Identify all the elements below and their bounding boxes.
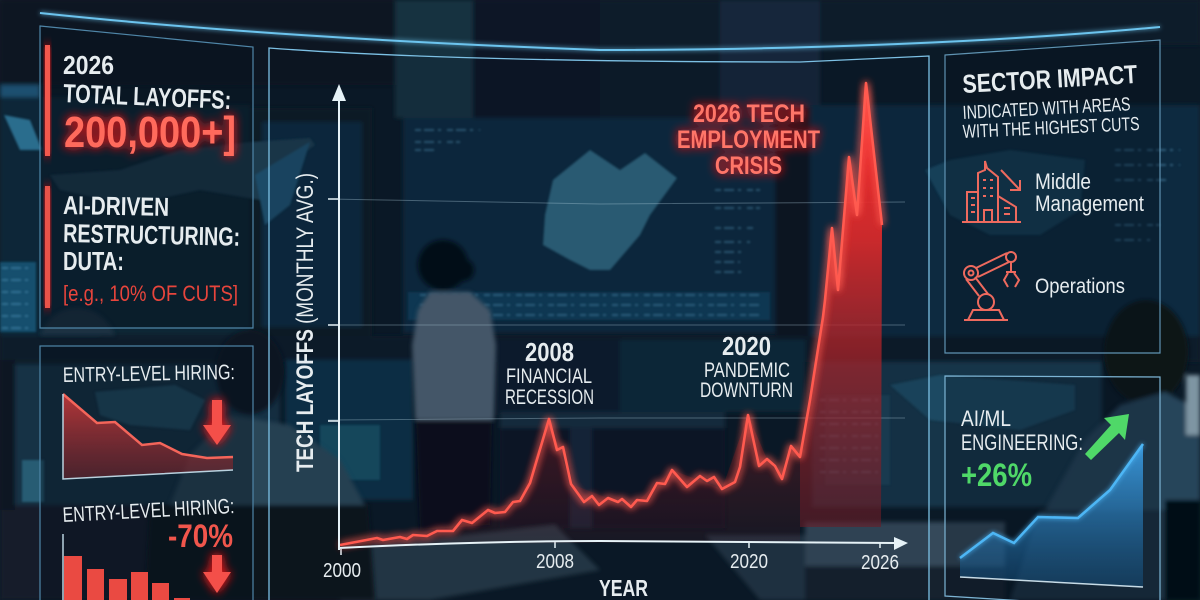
title: 2026 tech employment crisis: EMPLOYMENT	[677, 126, 820, 154]
label: entry-level hiring bars: ENTRY-LEVEL HIRING:	[62, 495, 235, 527]
tick labels: 2026	[861, 552, 899, 574]
title: 2026 tech employment crisis: CRISIS	[715, 152, 782, 180]
area: red fill under curve	[340, 83, 882, 545]
callout: 2020 pandemic downturn	[700, 331, 793, 402]
stat: minus 70 percent: -70%	[168, 518, 233, 554]
tick labels: 2020	[730, 551, 768, 573]
lower band	[0, 336, 1200, 362]
area chart: AI growth	[960, 444, 1143, 587]
icon: down arrow small	[203, 555, 231, 593]
callout: 2008 financial recession: FINANCIAL	[506, 365, 592, 388]
panel: entry-level hiring	[40, 346, 253, 600]
people	[40, 240, 1200, 600]
tick labels: 2008	[536, 551, 574, 573]
callout: 2020 pandemic downturn: PANDEMIC	[704, 359, 790, 382]
stat: 2026 total layoffs: 2026	[63, 50, 114, 80]
callout: 2020 pandemic downturn: 2020	[722, 331, 771, 361]
icon: building with down arrow	[962, 161, 1021, 222]
panel: headline stats	[40, 26, 253, 328]
axis title: y: TECH LAYOFFS (MONTHLY AVG.)	[292, 173, 319, 472]
right monitors	[810, 105, 1200, 340]
stat: 2026 total layoffs	[63, 50, 236, 157]
subheading	[962, 94, 1140, 143]
stat: AI-driven restructuring: AI-DRIVEN	[63, 190, 169, 222]
panel: sector impact	[945, 40, 1160, 353]
stat: AI-driven restructuring: [e.g., 10% OF CUTS]	[63, 281, 238, 306]
stat: AI-driven restructuring	[63, 190, 240, 306]
label: ENGINEERING:	[961, 430, 1083, 455]
label: middle management	[1035, 169, 1144, 216]
icon: down arrow	[203, 400, 231, 445]
subheading: WITH THE HIGHEST CUTS	[962, 114, 1140, 143]
panel: main chart	[269, 48, 929, 600]
title: 2026 tech employment crisis	[677, 100, 820, 180]
label: operations: Operations	[1035, 275, 1125, 298]
label: middle management: Middle	[1035, 169, 1091, 194]
area chart: hiring decline	[63, 394, 233, 479]
accent bar: AI restructuring	[45, 186, 50, 308]
stat: 2026 total layoffs: TOTAL LAYOFFS:	[63, 78, 232, 115]
center monitor	[403, 118, 775, 333]
label: middle management: Management	[1035, 191, 1144, 216]
panel: AI/ML engineering	[945, 376, 1160, 600]
icon: robotic arm	[964, 252, 1019, 320]
heading: SECTOR IMPACT	[962, 59, 1138, 99]
label: entry-level hiring line chart: ENTRY-LEVEL HIRING:	[63, 361, 235, 387]
label: AI/ML	[961, 406, 1011, 431]
subheading: INDICATED WITH AREAS	[962, 94, 1131, 124]
callout: 2008 financial recession	[505, 337, 594, 409]
x axis arrow	[339, 537, 908, 550]
bar chart: hiring	[63, 534, 190, 600]
grid lines	[328, 199, 905, 420]
tick labels	[323, 551, 899, 582]
stat: AI-driven restructuring: RESTRUCTURING:	[63, 218, 240, 252]
axis ticks	[328, 199, 880, 555]
top glowing frame line	[40, 13, 1160, 50]
tick labels: 2000	[323, 560, 361, 582]
label	[961, 406, 1083, 455]
icon: green up arrow	[1085, 414, 1129, 460]
accent bar: total layoffs	[45, 45, 50, 156]
stat: 2026 total layoffs: 200,000+]	[64, 108, 236, 157]
left monitors	[0, 85, 40, 97]
line: tech layoffs curve	[340, 83, 882, 545]
stat: AI-driven restructuring: DUTA:	[63, 246, 124, 276]
callout: 2008 financial recession: RECESSION	[505, 386, 594, 409]
y axis arrow	[332, 84, 346, 550]
callout: 2020 pandemic downturn: DOWNTURN	[700, 379, 793, 402]
monitor maps	[0, 115, 1085, 502]
stat: +26%: +26%	[961, 457, 1032, 493]
monitor data rows	[2, 130, 1180, 472]
title: 2026 tech employment crisis: 2026 TECH	[693, 100, 805, 128]
callout: 2008 financial recession: 2008	[525, 337, 574, 367]
desks	[340, 525, 600, 600]
